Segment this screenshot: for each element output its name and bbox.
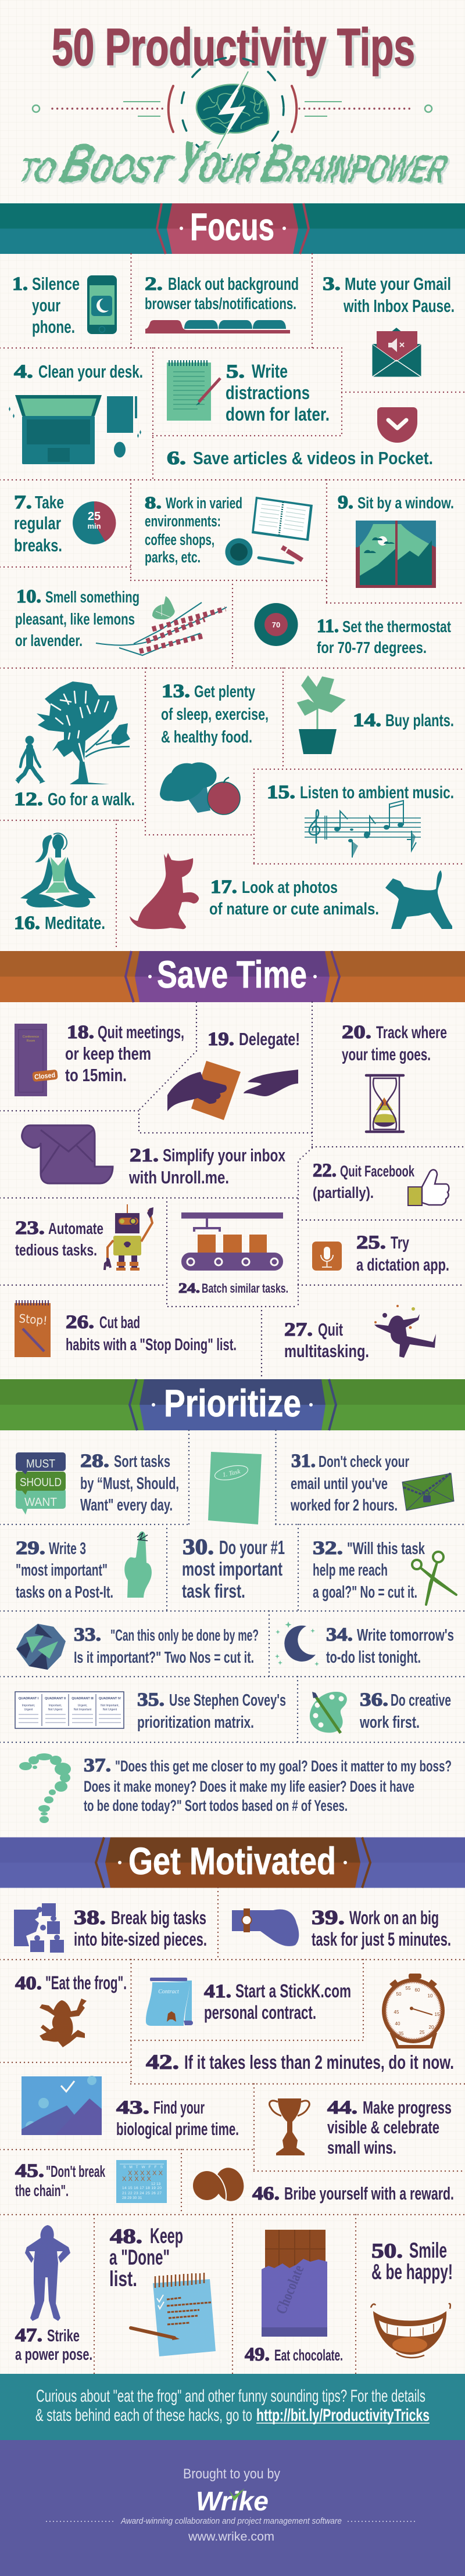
tip 25: try a dictation app: Try: [391, 1233, 409, 1253]
tip 18: quit meetings: or keep them: [65, 1043, 151, 1064]
tip 43: biological prime time: 43.: [116, 2097, 149, 2118]
tip 18: quit meetings: Quit meetings,: [98, 1022, 184, 1042]
tip 48: keep a done list: 48.: [110, 2225, 142, 2248]
tip 4: clean your desk: 4.: [14, 361, 33, 382]
tip 20: track where your time goes: [342, 1022, 447, 1132]
tip 3: mute your gmail: 3.: [323, 274, 341, 295]
panel: get motivated tips: [0, 1888, 465, 2374]
subtitle: to Boost Your Brainpower: to: [13, 138, 64, 193]
tip 28: must should want: Want" every day.: [80, 1496, 173, 1515]
tip 5: write distractions: distractions: [226, 382, 310, 403]
icon: stopwatch: 20: [429, 2025, 434, 2030]
tip 10: smell lemons or lavender: [15, 586, 227, 655]
icon: stopwatch: 45: [394, 2010, 399, 2015]
tip 33: can this only be done by me: 33.: [74, 1624, 101, 1645]
tip 38: break big tasks: [14, 1903, 207, 1953]
tip 16: meditate: [14, 833, 105, 934]
tip 1: silence your phone: phone.: [32, 317, 75, 337]
tip 45: don't break the chain: the chain".: [15, 2182, 69, 2200]
tip 28: must should want: WANT: [24, 1496, 57, 1509]
tip 15: listen to ambient music: 15.: [267, 782, 295, 803]
tip 43: biological prime time: [22, 2076, 239, 2139]
tip 17: look at nature or cute animals: 17.: [210, 877, 237, 898]
tip 11: set the thermostat: 70: [272, 620, 280, 629]
tip 31: don't check your email: email until you've: [291, 1474, 388, 1492]
tip 35: stephen covey matrix: [15, 1689, 286, 1732]
tip 27: quit multitasking: Quit: [318, 1319, 343, 1340]
tip 49: eat chocolate: Eat chocolate.: [274, 2347, 343, 2364]
tip 32: will this task help me reach a goal: help me reach: [313, 1561, 388, 1580]
tip 22: quit facebook: [313, 1160, 449, 1206]
footer: brought to you by wrike: Brought to you by: [183, 2466, 280, 2482]
tip 23: automate tedious tasks: [15, 1204, 153, 1271]
tip 2: black out background tabs: browser tabs/notifications.: [145, 295, 296, 313]
tip 21: simplify your inbox: with Unroll.me.: [128, 1167, 229, 1187]
icon: stopwatch: 25: [420, 2030, 425, 2035]
tip 44: progress and small wins: small wins.: [327, 2137, 396, 2158]
icon: stopwatch: 50: [396, 1992, 402, 1997]
section banner: Get Motivated: [0, 1837, 465, 1888]
tip 7: take regular breaks: 7.: [14, 492, 32, 513]
tip 17: look at nature or cute animals: Look at photos: [242, 878, 338, 897]
footer: brought to you by wrike: [0, 2440, 465, 2576]
tip 45: don't break the chain: 45.: [15, 2161, 44, 2182]
tip 7: take regular breaks: regular: [14, 513, 61, 533]
tip 6: save articles in pocket: 6.: [167, 448, 186, 469]
tip 29: write 3 most important: "most important": [16, 1561, 108, 1580]
icon: stopwatch: 10: [428, 1993, 433, 1999]
tip 33: can this only be done by me: "Can this only be done by me?: [110, 1626, 259, 1644]
icon: stopwatch: 55: [406, 1986, 411, 1991]
tip 7: take regular breaks: breaks.: [14, 535, 62, 555]
tip 18: quit meetings: 18.: [67, 1022, 94, 1043]
tip 24: batch similar tasks: 24.: [178, 1281, 200, 1296]
tip 47: strike a power pose: 47.: [15, 2325, 42, 2346]
tip 25: try a dictation app: [312, 1232, 449, 1275]
tip 47: strike a power pose: a power pose.: [15, 2345, 92, 2364]
tip 10: smell lemons or lavender: Smell something: [45, 588, 140, 606]
tip 43: biological prime time: biological prime time.: [116, 2119, 239, 2139]
tip 10: smell lemons or lavender: 10.: [16, 586, 41, 607]
tip 45: don't break the chain: 21 22 23 24 25 26 27: [122, 2191, 162, 2195]
tip 5: write distractions: [167, 360, 330, 425]
footer: brought to you by wrike: Award-winning collaboration and project management software: [120, 2516, 342, 2526]
tip 35: stephen covey matrix: Not Urgent: [103, 1708, 117, 1712]
tip 36: do creative work first: work first.: [359, 1713, 420, 1732]
footer: brought to you by wrike: www.wrike.com: [188, 2530, 274, 2543]
tip 19: delegate: Delegate!: [239, 1029, 300, 1049]
tip 49: eat chocolate: Chocolate: [273, 2263, 307, 2316]
tip 47: strike a power pose: Strike: [47, 2327, 80, 2345]
tip 38: break big tasks: Break big tasks: [111, 1907, 206, 1928]
tip 1: silence your phone: 1.: [12, 274, 28, 295]
tip 24: batch similar tasks: [178, 1212, 288, 1296]
tip 35: stephen covey matrix: 35.: [137, 1689, 164, 1710]
tip 2: black out background tabs: [145, 274, 299, 333]
tip 7: take regular breaks: Take: [35, 492, 64, 512]
tip 26: stop doing list: 26.: [66, 1312, 94, 1333]
tip 43: biological prime time: Find your: [153, 2097, 205, 2118]
tip 22: quit facebook: (partially).: [313, 1184, 374, 1201]
call to action band: & stats behind each of these hacks, go to: [35, 2406, 252, 2425]
tip 16: meditate: 16.: [14, 913, 40, 934]
section banner: Prioritize: Prioritize: [164, 1382, 301, 1425]
icon: stopwatch: 60: [415, 1987, 420, 1993]
tip 13: sleep exercise healthy food: of sleep, exercise,: [161, 705, 269, 724]
tip 49: eat chocolate: [245, 2230, 343, 2365]
tip 2: black out background tabs: Black out background: [168, 274, 299, 294]
tip 30: do your #1 task first: most important: [182, 1558, 282, 1580]
tip 29: write 3 most important: [16, 1531, 152, 1602]
tip 50: smile and be happy: [371, 2238, 453, 2358]
icon: post-it with 1 task: 1. Task: [222, 1468, 242, 1479]
tip 45: don't break the chain: S M T W F F S: [123, 2165, 163, 2169]
tip 33: can this only be done by me: Is it important?" Two Nos = cut it.: [74, 1648, 254, 1666]
icon: stopwatch: 40: [395, 2021, 400, 2026]
tip 21: simplify your inbox: 21.: [130, 1145, 159, 1166]
tip 39: work on a big task: [232, 1906, 451, 1950]
tip 30: do your #1 task first: Do your #1: [219, 1537, 285, 1558]
tip 19: delegate: [167, 1029, 300, 1120]
tip 26: stop doing list: habits with a "Stop Doing" list.: [66, 1336, 237, 1354]
panel: focus tips: [0, 254, 465, 949]
tip 38: break big tasks: into bite-sized pieces.: [74, 1929, 207, 1950]
tip 44: progress and small wins: [269, 2097, 452, 2158]
tip 21: simplify your inbox: [22, 1125, 286, 1187]
tip 23: automate tedious tasks: tedious tasks.: [15, 1241, 97, 1259]
tip 18: quit meetings: to 15min.: [65, 1065, 127, 1085]
tip 40: eat the frog: 40.: [15, 1973, 42, 1994]
tip 30: do your #1 task first: [182, 1535, 285, 1602]
tip 45: don't break the chain: 14 15 16 17 18 19 20: [122, 2186, 162, 2190]
tip 27: quit multitasking: multitasking.: [284, 1341, 369, 1361]
tip 26: stop doing list: Stop!: [19, 1311, 48, 1328]
tip 7: take regular breaks: [14, 492, 116, 555]
tip 8: work in varied environments: environments:: [145, 512, 221, 530]
panel: prioritize tips: [0, 1430, 465, 1823]
tip 9: sit by a window: [338, 492, 454, 588]
tip 27: quit multitasking: 27.: [284, 1319, 313, 1340]
tip 50: smile and be happy: 50.: [371, 2239, 403, 2262]
tip 29: write 3 most important: Write 3: [49, 1540, 86, 1558]
tip 41: stickk personal contract: 41.: [204, 1981, 231, 2002]
tip 6: save articles in pocket: [167, 407, 433, 469]
tip 46: bribe yourself with a reward: 46.: [252, 2183, 280, 2204]
tip 13: sleep exercise healthy food: 13.: [162, 681, 190, 702]
tip 8: work in varied environments: 8.: [145, 493, 162, 512]
tip 45: don't break the chain: XXXXXX: [128, 2170, 163, 2177]
tip 40: eat the frog: "Eat the frog".: [45, 1972, 127, 1993]
tip 8: work in varied environments: coffee shops,: [145, 531, 214, 548]
tip 28: must should want: [16, 1451, 179, 1515]
tip 15: listen to ambient music: [267, 782, 454, 858]
tip 29: write 3 most important: 29.: [16, 1538, 45, 1559]
tip 23: automate tedious tasks: Automate: [48, 1219, 103, 1237]
tip 25: try a dictation app: 25.: [356, 1232, 386, 1253]
tip 7: take regular breaks: 25: [88, 510, 101, 523]
tip 46: bribe yourself with a reward: [193, 2165, 454, 2204]
tip 13: sleep exercise healthy food: Get plenty: [194, 683, 255, 701]
tip 41: stickk personal contract: Start a StickK.com: [235, 1981, 351, 2001]
section banner: Prioritize: [0, 1379, 465, 1430]
tip 48: keep a done list: Keep: [150, 2224, 183, 2248]
tip 16: meditate: Meditate.: [45, 913, 105, 933]
subtitle: to Boost Your Brainpower: Boost: [55, 133, 181, 194]
tip 49: eat chocolate: 49.: [245, 2344, 270, 2365]
icon: stopwatch: 15: [435, 2012, 440, 2017]
subtitle: to Boost Your Brainpower: [13, 129, 457, 195]
tip 5: write distractions: 5.: [226, 361, 245, 382]
panel: save time tips: [0, 1002, 465, 1380]
tip 48: keep a done list: list.: [109, 2267, 137, 2291]
tip 24: batch similar tasks: Batch similar tasks.: [202, 1281, 288, 1296]
tip 1: silence your phone: your: [32, 295, 60, 315]
tip 18: quit meetings: Room: [27, 1039, 35, 1043]
icon: stopwatch: [382, 1974, 445, 2047]
tip 28: must should want: MUST: [26, 1458, 55, 1470]
tip 20: track where your time goes: 20.: [342, 1022, 371, 1043]
tip 13: sleep exercise healthy food: & healthy food.: [161, 728, 252, 747]
tip 35: stephen covey matrix: prioritization matrix.: [137, 1713, 254, 1732]
tip 45: don't break the chain: 28 29 30 31: [122, 2196, 142, 2200]
tip 36: do creative work first: 36.: [360, 1689, 388, 1710]
tip 5: write distractions: down for later.: [226, 404, 330, 425]
tip 42: two minute rule: 42.: [146, 2050, 179, 2073]
tip 22: quit facebook: Quit Facebook: [340, 1163, 415, 1180]
tip 31: don't check your email: [290, 1451, 454, 1514]
tip 41: stickk personal contract: Contract: [158, 1989, 179, 1995]
tip 31: don't check your email: 31.: [291, 1451, 316, 1472]
tip 40: eat the frog: [15, 1972, 127, 2047]
tip 35: stephen covey matrix: Not Important: [74, 1708, 92, 1712]
tip 41: stickk personal contract: personal contract.: [204, 2002, 316, 2023]
tip 41: stickk personal contract: [146, 1978, 351, 2026]
tip 19: delegate: 19.: [208, 1029, 234, 1050]
tip 50: smile and be happy: Smile: [409, 2238, 447, 2262]
tip 38: break big tasks: 38.: [74, 1906, 106, 1929]
section banner: Save Time: [0, 951, 465, 1002]
tip 32: will this task help me reach a goal: [313, 1538, 456, 1605]
tip 9: sit by a window: 9.: [338, 492, 353, 513]
section banner: Focus: Focus: [190, 205, 274, 248]
tip 35: stephen covey matrix: QUADRANT I: [19, 1697, 39, 1700]
tip 10: smell lemons or lavender: pleasant, like lemons: [15, 610, 135, 628]
tip 26: stop doing list: Cut bad: [99, 1314, 140, 1332]
tip 34: write tomorrow's to-do list: [275, 1621, 454, 1667]
tip 14: buy plants: 14.: [353, 710, 381, 731]
tip 45: don't break the chain: 12 13: [151, 2182, 161, 2186]
tip 23: automate tedious tasks: 23.: [15, 1218, 45, 1239]
tip 39: work on a big task: 39.: [312, 1906, 345, 1929]
tip 18: quit meetings: Conference: [23, 1035, 39, 1039]
tip 35: stephen covey matrix: Important,: [22, 1704, 35, 1707]
tip 18: quit meetings: Closed: [34, 1071, 56, 1081]
tip 47: strike a power pose: [15, 2225, 92, 2364]
tip 17: look at nature or cute animals: [130, 853, 452, 929]
icon: stopwatch: 35: [399, 2031, 404, 2036]
tip 26: stop doing list: [15, 1300, 237, 1357]
tip 35: stephen covey matrix: Use Stephen Covey's: [169, 1691, 286, 1710]
tip 35: stephen covey matrix: Important,: [49, 1704, 62, 1707]
tip 22: quit facebook: 22.: [313, 1160, 337, 1181]
tip 6: save articles in pocket: Save articles & videos in Pocket.: [193, 448, 433, 468]
icon: brain with lightning bolt: [33, 58, 432, 160]
tip 11: set the thermostat: for 70-77 degrees.: [317, 638, 427, 656]
tip 31: don't check your email: Don't check your: [319, 1452, 409, 1470]
tip 32: will this task help me reach a goal: "Will this task: [347, 1540, 425, 1558]
tip 17: look at nature or cute animals: of nature or cute animals.: [209, 900, 379, 919]
tip 35: stephen covey matrix: QUADRANT IV: [99, 1697, 121, 1700]
tip 35: stephen covey matrix: Urgent,: [78, 1704, 87, 1707]
tip 18: quit meetings: [15, 1022, 184, 1096]
tip 12: go for a walk: [14, 681, 135, 810]
section banner: Save Time: Save Time: [157, 953, 307, 996]
tip 34: write tomorrow's to-do list: to-do list tonight.: [326, 1648, 421, 1667]
tip 44: progress and small wins: 44.: [327, 2097, 357, 2118]
tip 35: stephen covey matrix: QUADRANT III: [71, 1697, 94, 1700]
tip 34: write tomorrow's to-do list: 34.: [326, 1624, 353, 1645]
tip 2: black out background tabs: 2.: [145, 274, 163, 295]
tip 33: can this only be done by me: [16, 1624, 259, 1670]
tip 48: keep a done list: a "Done": [109, 2245, 170, 2269]
tip 1: silence your phone: [12, 274, 117, 337]
tip 12: go for a walk: Go for a walk.: [48, 789, 135, 809]
tip 32: will this task help me reach a goal: 32.: [313, 1538, 343, 1559]
tip 36: do creative work first: [310, 1689, 451, 1733]
footer: brought to you by wrike: Wrike: [196, 2486, 269, 2516]
tip 35: stephen covey matrix: QUADRANT II: [45, 1697, 66, 1700]
tip 21: simplify your inbox: Simplify your inbox: [163, 1145, 286, 1165]
tip 35: stephen covey matrix: Urgent: [24, 1708, 33, 1712]
tip 37: does this get me closer to my goal: [19, 1753, 452, 1823]
tip 45: don't break the chain: XXXXX: [122, 2176, 152, 2183]
tip 4: clean your desk: [9, 361, 143, 464]
tip 45: don't break the chain: "Don't break: [46, 2162, 105, 2180]
tip 28: must should want: by “Must, Should,: [80, 1474, 179, 1493]
tip 28: must should want: SHOULD: [20, 1476, 62, 1489]
tip 48: keep a done list: [109, 2224, 216, 2356]
tip 8: work in varied environments: parks, etc.: [145, 548, 201, 566]
tip 7: take regular breaks: min: [87, 522, 101, 530]
subtitle: to Boost Your Brainpower: Your: [169, 129, 267, 195]
tip 3: mute your gmail: [323, 274, 455, 377]
tip 1: silence your phone: Silence: [32, 274, 80, 294]
call to action band: [0, 2374, 465, 2440]
tip 35: stephen covey matrix: Not Urgent: [48, 1708, 63, 1712]
tip 30: do your #1 task first: task first.: [182, 1580, 245, 1602]
tip 30: do your #1 task first: 30.: [183, 1535, 214, 1559]
tip 31: don't check your email: worked for 2 hours.: [290, 1496, 398, 1514]
tip 27: quit multitasking: [284, 1305, 436, 1361]
section banner: Focus: [0, 203, 465, 254]
tip 10: smell lemons or lavender: or lavender.: [15, 632, 83, 650]
tip 5: write distractions: Write: [252, 361, 288, 382]
tip 37: does this get me closer to my goal: 37.: [84, 1755, 111, 1776]
tip 35: stephen covey matrix: Not Important,: [101, 1704, 119, 1707]
tip 8: work in varied environments: Work in varied: [166, 494, 242, 512]
tip 11: set the thermostat: 11.: [317, 616, 339, 637]
tip 4: clean your desk: Clean your desk.: [38, 361, 143, 382]
tip 37: does this get me closer to my goal: to be done today?" Sort todos based on # of Yeses.: [84, 1797, 348, 1814]
tip 12: go for a walk: 12.: [14, 789, 43, 810]
tip 14: buy plants: [298, 677, 454, 754]
tip 28: must should want: 28.: [80, 1451, 109, 1472]
tip 8: work in varied environments: [145, 493, 313, 566]
tip 45: don't break the chain: [15, 2160, 167, 2203]
section banner: Get Motivated: Get Motivated: [128, 1839, 336, 1882]
icon: post-it with 1 task: [208, 1452, 262, 1524]
tip 11: set the thermostat: [255, 603, 451, 656]
tip 13: sleep exercise healthy food: [160, 681, 269, 815]
tip 29: write 3 most important: tasks on a Post-It.: [16, 1583, 113, 1602]
tip 28: must should want: Sort tasks: [114, 1452, 170, 1471]
